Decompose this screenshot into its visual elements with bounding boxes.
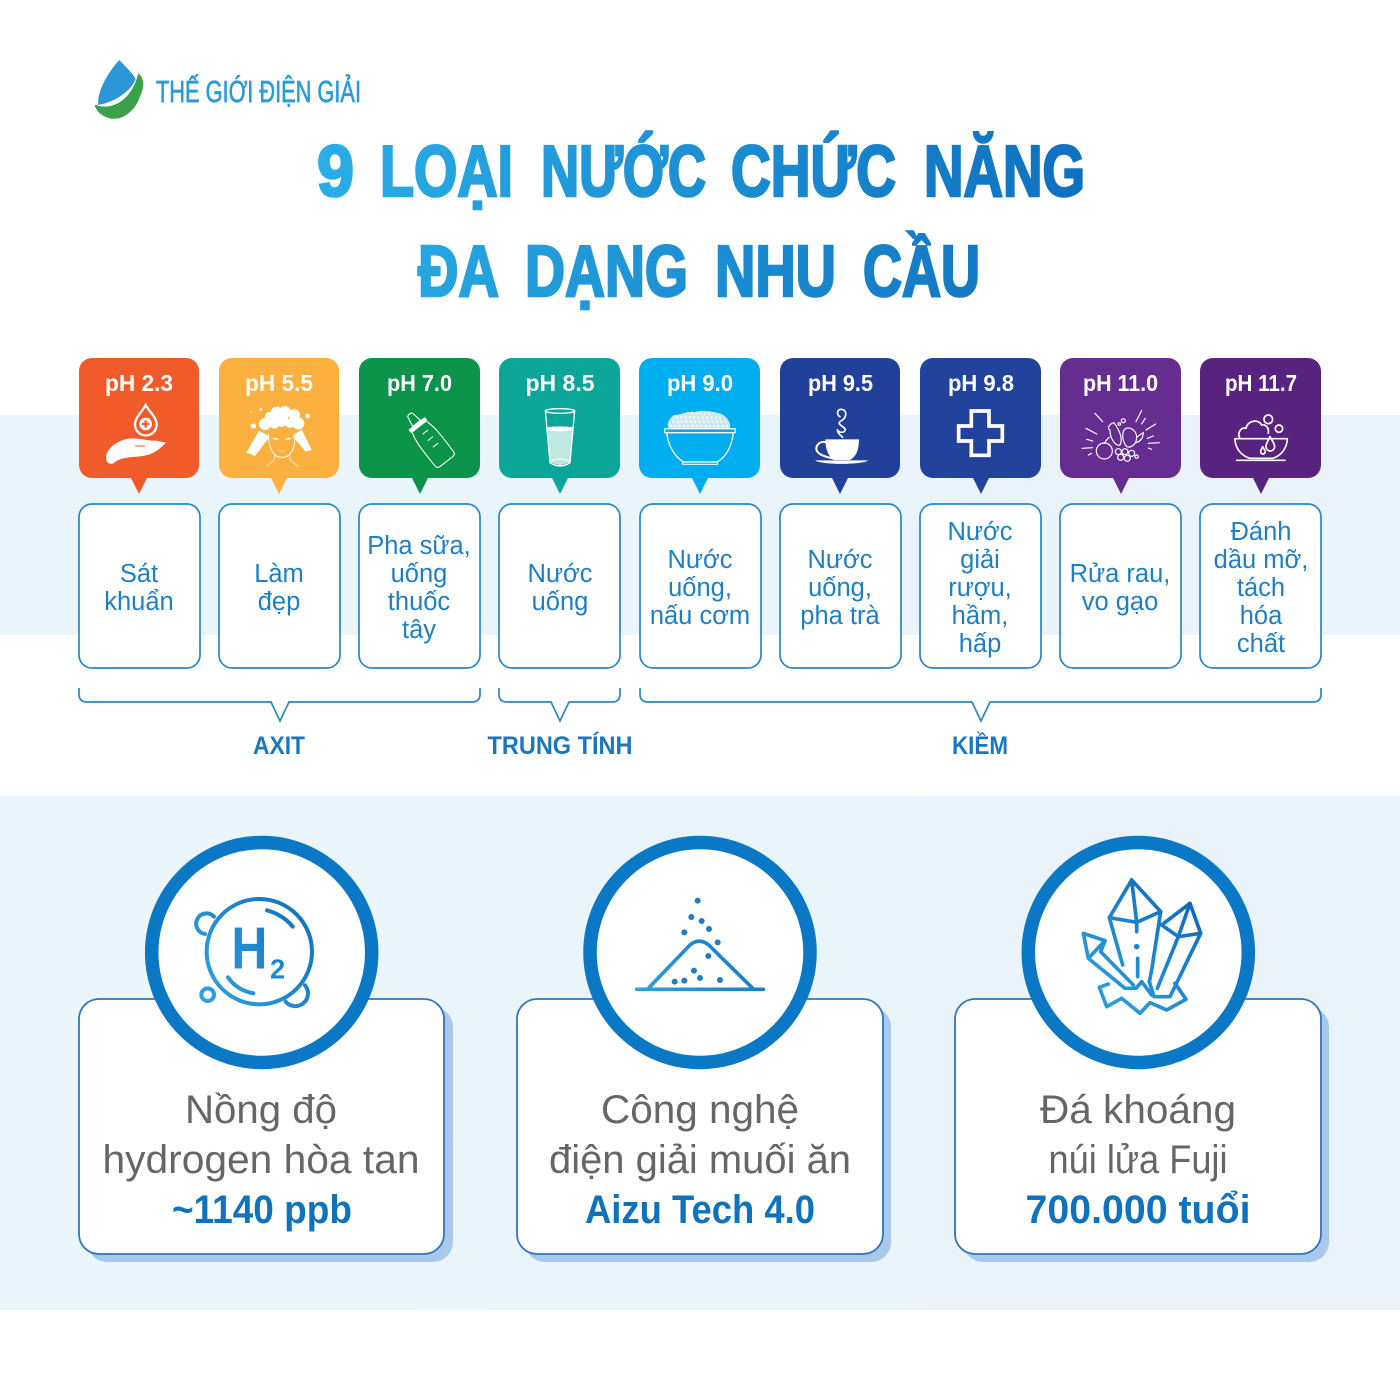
box: Nước giải rượu, hầm, hấp: rượu,	[948, 574, 1012, 602]
tile: pH 5.5: pH 5.5	[245, 370, 313, 396]
title	[317, 131, 1085, 312]
tile: pH 9.0: pH 9.0	[667, 370, 733, 396]
icon: H2 molecule: 2	[270, 954, 285, 985]
panel: hydrogen: Nồng độ	[185, 1088, 337, 1132]
title line 2	[418, 231, 980, 312]
tile: pH 11.7	[1200, 358, 1321, 494]
box: Pha sữa, uống thuốc tây	[359, 504, 480, 668]
box: Nước uống, pha trà: uống,	[808, 574, 872, 602]
panel: salt electrolysis: Công nghệ	[601, 1088, 799, 1132]
tile: pH 7.0	[359, 358, 480, 494]
box: Nước uống, nấu cơm: Nước	[668, 546, 733, 574]
icon: H2 molecule: H	[231, 914, 267, 981]
group: AXIT	[79, 688, 480, 760]
box: Đánh dầu mỡ, tách hóa chất: hóa	[1240, 602, 1283, 630]
panel: uses	[79, 504, 1321, 668]
box: Sát khuẩn: khuẩn	[104, 588, 174, 616]
title line 1: NƯỚC	[541, 131, 706, 212]
tile: pH 7.0: pH 7.0	[387, 370, 452, 396]
tile: pH 5.5	[219, 358, 339, 494]
box: Nước uống, pha trà: Nước	[808, 546, 873, 574]
box: Nước uống, pha trà: pha trà	[800, 602, 881, 630]
title line 1: LOẠI	[380, 132, 513, 212]
tile: pH 2.3: pH 2.3	[105, 370, 173, 396]
box: Rửa rau, vo gạo: vo gạo	[1082, 588, 1158, 616]
title line 1: 9	[317, 132, 354, 212]
box: Đánh dầu mỡ, tách hóa chất	[1200, 504, 1321, 668]
tile: pH 9.5	[780, 358, 900, 494]
box: Sát khuẩn: Sát	[120, 560, 158, 588]
title line 2: DẠNG	[525, 232, 688, 312]
tile: pH 2.3	[79, 358, 199, 494]
title line 2: CẦU	[863, 231, 980, 312]
box: Pha sữa, uống thuốc tây: Pha sữa,	[367, 532, 471, 560]
icon: medical cross	[959, 411, 1002, 455]
title line 1	[317, 131, 1085, 212]
icon: H2 molecule	[196, 899, 312, 1006]
panel: salt electrolysis	[517, 842, 891, 1262]
icon: cup of tea	[815, 409, 868, 464]
box: Làm đẹp: đẹp	[258, 588, 300, 616]
icon: fruits and vegetables	[1082, 411, 1159, 461]
box: Nước giải rượu, hầm, hấp	[920, 504, 1041, 668]
icon: logo water drop	[95, 60, 143, 119]
box: Nước uống	[499, 504, 620, 668]
box: Nước giải rượu, hầm, hấp: hấp	[959, 630, 1001, 658]
icon: hand with drop	[106, 405, 166, 464]
box: Pha sữa, uống thuốc tây: tây	[402, 616, 436, 644]
box: Nước uống: uống	[532, 588, 588, 616]
tile: pH 11.0: pH 11.0	[1083, 370, 1158, 396]
panel: hydrogen	[79, 842, 453, 1262]
tile: pH 11.7: pH 11.7	[1225, 370, 1297, 396]
box: Đánh dầu mỡ, tách hóa chất: Đánh	[1231, 518, 1291, 546]
box: Pha sữa, uống thuốc tây: thuốc	[388, 588, 450, 616]
box: Đánh dầu mỡ, tách hóa chất: dầu mỡ,	[1214, 546, 1308, 574]
title line 2: ĐA	[418, 232, 499, 312]
panel: pH tiles	[79, 358, 1321, 494]
title line 1: NĂNG	[924, 132, 1085, 212]
group: AXIT: AXIT	[253, 732, 305, 760]
icon: glass of water	[545, 409, 575, 466]
logo: Thế Giới Điện Giải	[95, 60, 361, 119]
tile: pH 8.5	[499, 358, 620, 494]
box: Đánh dầu mỡ, tách hóa chất: chất	[1237, 630, 1285, 658]
tile: pH 9.8: pH 9.8	[948, 370, 1014, 396]
box: Nước uống: Nước	[528, 560, 593, 588]
panel: Fuji mineral stone: Đá khoáng	[1040, 1088, 1236, 1132]
box: Nước giải rượu, hầm, hấp: hầm,	[952, 602, 1008, 630]
panel: salt electrolysis: điện giải muối ăn	[549, 1138, 851, 1182]
box: Nước uống, nấu cơm: uống,	[668, 574, 732, 602]
box: Nước uống, nấu cơm: nấu cơm	[650, 602, 750, 630]
group: KIỀM: KIỀM	[952, 731, 1008, 760]
box: Rửa rau, vo gạo	[1060, 504, 1181, 668]
logo wordmark: THẾ GIỚI ĐIỆN GIẢI	[156, 74, 361, 109]
box: Rửa rau, vo gạo: Rửa rau,	[1070, 560, 1170, 588]
tile: pH 9.8	[920, 358, 1041, 494]
box: Nước giải rượu, hầm, hấp: Nước	[948, 518, 1013, 546]
group: TRUNG TÍNH: TRUNG TÍNH	[488, 731, 632, 760]
background band: features section	[0, 796, 1400, 1310]
group: TRUNG TÍNH	[488, 688, 632, 760]
box: Nước uống, pha trà	[780, 504, 901, 668]
background band: pH section	[0, 415, 1400, 635]
panel: hydrogen: hydrogen hòa tan	[102, 1138, 419, 1182]
icon: salt pile	[637, 898, 763, 989]
group: KIỀM	[640, 688, 1321, 760]
icon: baby bottle	[400, 407, 456, 469]
box: Làm đẹp: Làm	[254, 560, 304, 588]
panel: Fuji mineral stone: 700.000 tuổi	[1026, 1188, 1250, 1232]
icon: crystals	[1083, 880, 1201, 1013]
title line 1: CHỨC	[731, 131, 896, 212]
title line 2: NHU	[715, 232, 836, 312]
box: Đánh dầu mỡ, tách hóa chất: tách	[1237, 574, 1285, 602]
panel: hydrogen: ~1140 ppb	[172, 1188, 352, 1232]
tile: pH 9.0	[639, 358, 760, 494]
box: Nước uống, nấu cơm	[640, 504, 761, 668]
icon: woman washing hair	[246, 406, 312, 467]
box: Sát khuẩn	[79, 504, 200, 668]
tile: pH 9.5: pH 9.5	[808, 370, 873, 396]
box: Nước giải rượu, hầm, hấp: giải	[960, 546, 1000, 574]
tile: pH 11.0	[1060, 358, 1181, 494]
box: Pha sữa, uống thuốc tây: uống	[391, 560, 447, 588]
icon: bowl of rice	[665, 411, 735, 464]
panel: salt electrolysis: Aizu Tech 4.0	[585, 1188, 815, 1232]
panel: Fuji mineral stone	[955, 842, 1329, 1262]
icon: bowl with bubbles	[1235, 415, 1287, 460]
tile: pH 8.5: pH 8.5	[526, 370, 595, 396]
panel: Fuji mineral stone: núi lửa Fuji	[1048, 1138, 1228, 1182]
box: Làm đẹp	[219, 504, 340, 668]
